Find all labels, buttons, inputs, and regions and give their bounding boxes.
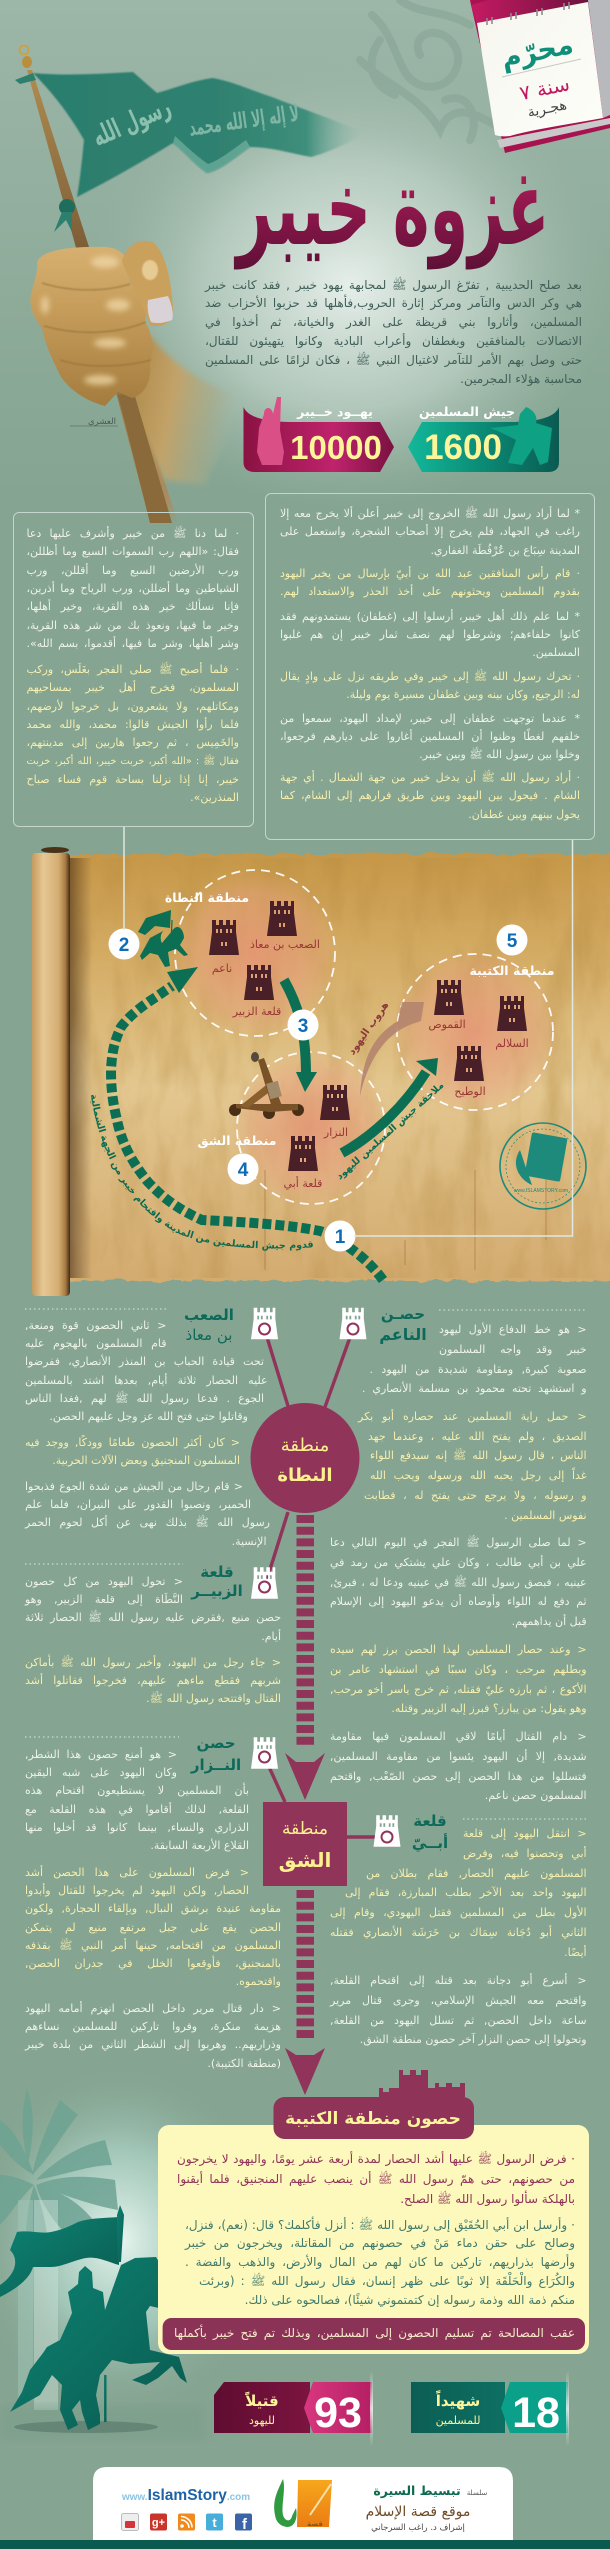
text: Katiba siege (177, 2150, 575, 2206)
text: hypocrites warning (280, 566, 580, 598)
fort headings: أبــيّ (412, 1833, 448, 1852)
text: Naim fort 4: وبطلهم مرحب ، وكان سببًا في استشهاد عامر بن (330, 1663, 587, 1676)
text: Zubayr fort 2 (25, 1654, 281, 1705)
map labels: منطقة النطاة (165, 890, 249, 905)
text: departure to Khaybar (280, 506, 580, 557)
callout connectors to the map (124, 827, 572, 1236)
text: Naim fort 5: المسلمون حصن ناعم. (485, 1789, 587, 1802)
text: Naim fort 2 (358, 1409, 587, 1522)
text: Naim fort 3: قبل أن يداهمهم. (512, 1615, 587, 1628)
text: morning arrival: · فلما أصبح ﷺ صلى الفجر بغَلَس، وركب (26, 663, 239, 676)
route: arrival of the Muslim army (111, 967, 383, 1280)
map labels: قلعة أبي (284, 1176, 322, 1190)
text: Naim fort 5: شديدة, إلا أن اليهود يئسوا من مقاومة المسلمين, (330, 1750, 587, 1763)
dotted separators (25, 1309, 587, 1819)
text: Saab fort 2: المسلمون المنجنيق وبعض الآلات الحربية. (52, 1454, 240, 1467)
map labels (165, 890, 555, 1190)
castles (209, 901, 527, 1171)
text: Ubayy fort 1: المسلمون عليهم الحصار, فقام بطلان من (366, 1867, 587, 1880)
text: Nizar fort 2: بالمنجنيق، فأوقعوا الخلل في جدران الحصن, (25, 1957, 281, 1970)
text: Zubayr fort 2: القتال وافتتحه رسول الله ﷺ. (146, 1692, 281, 1705)
fort headings: النــزار (190, 1756, 241, 1774)
icon: green flag (15, 72, 366, 232)
fort headings: قلعة (200, 1563, 234, 1581)
text: northern entry: يحول بينهم وبين غطفان. (468, 808, 580, 821)
numbered markers: 2 (119, 935, 129, 956)
panel: intro text (204, 276, 582, 386)
text: Katiba siege: بالهلكة سألوا رسول الله ﷺ الصلح. (400, 2192, 575, 2206)
text: Naim fort 2: الصديق ، ولم يفتح الله عليه ، وعندما جهد (368, 1430, 587, 1443)
fort icons with map pins (251, 1308, 400, 1847)
text: prayer on approach: الشياطين وما أضللن، ورب الرياح وما أذرين، (26, 582, 239, 595)
stamp: www.ISLAMSTORY.com (514, 1188, 568, 1194)
text: Naim fort 4 (330, 1643, 587, 1715)
text: Ubayy fort 1: أيضًا. (564, 1946, 587, 1959)
social icons (122, 2514, 252, 2533)
series credits (366, 2483, 487, 2533)
stat: 93 killed: لليهود (249, 2414, 275, 2427)
artist signature: العشري (88, 417, 116, 427)
text: Nizar fort 2: مقاومة عنيدة برشق النبال, وبإلقاء الحجارة, ولكون (25, 1902, 281, 1915)
text: Katiba settlement: وأرضها بذراريهم، تاركين ما كان لهم من المال والأرض، والذهب والفضة . (185, 2255, 575, 2269)
text: Saab fort 1 (25, 1319, 268, 1423)
text: prayer on approach: وخير ما فيها، ونعوذ بك من شر هذه القرية، (26, 619, 239, 632)
text: prayer on approach: · لما دنا ﷺ من خيبر وأشرف عليها دعا (26, 527, 239, 540)
text: Zubayr fort 1 (24, 1575, 281, 1643)
hub: Natat zone: النطاة (277, 1465, 333, 1486)
icon: catapult (229, 1052, 304, 1119)
social icons: f (242, 2516, 248, 2533)
text: Saab fort 1: < ثاني الحصون قوة ومنعة, (25, 1319, 166, 1332)
map labels: القموص (428, 1018, 466, 1031)
text: morning arrival: خيبر، إنا إذا نزلنا بساحة قوم فساء صباح (26, 773, 239, 786)
text: Naim fort 3 (330, 1534, 587, 1628)
text: Naim fort 4: وهو يقول: من يبارز؟ فبرز إليه الزبير وقتله. (391, 1702, 587, 1715)
map labels: الوطيح (454, 1085, 486, 1098)
panel: right prelude box (265, 493, 595, 840)
text: Naim fort 1: و استشهد تحته محمود بن مسلمة الأنصاري . (362, 1382, 587, 1395)
text: Naim fort 2: غداً إلى رجل يحبه الله ورسوله ويحب الله (370, 1469, 587, 1482)
hub: Shaq zone: منطقة (282, 1819, 328, 1839)
text: Ubayy fort 1: < انتقل اليهود إلى قلعة (463, 1827, 587, 1840)
text: northern entry (280, 770, 580, 821)
text: Saab fort 3: الحمير، ونصبوا القدور على النيران، فلما علم (25, 1498, 251, 1511)
map labels: ملاحقة جيش المسلمين لليهود (334, 1080, 446, 1182)
text: Saab fort 1: وقاتلوا حتى فتح الله عز وجل عليهم الحصن. (49, 1410, 248, 1423)
text: prayer on approach (26, 526, 239, 650)
icon: green flag: رسول الله (88, 91, 175, 153)
stat badge: Muslim army 1600: 1600 (424, 428, 502, 467)
fort headings (184, 1305, 448, 1852)
text: Nizar fort 3: هزيمة منكرة، وفروا تاركين للمسلمين نساءهم (25, 2020, 281, 2033)
text: Naim fort 4: < وعند حصار المسلمين لهذا الحصن برز لهم سيده (330, 1643, 587, 1656)
calendar: date of the battle: محرّم (498, 29, 576, 74)
calendar: date of the battle: هجـرية (526, 97, 568, 121)
text: Ubayy fort 1: اليهود واحد بعد الآخر بطلب المبارزة، فقام إلى (345, 1886, 587, 1899)
panel: parchment map (32, 847, 610, 1296)
banner: Katiba forts heading (274, 2070, 474, 2139)
text: Nizar fort 3 (24, 2001, 281, 2070)
panel: intro text: بعد صلح الحديبية , تفرّغ الرسول ﷺ لمجابهة يهود خيبر , فقد كانت خيبر (205, 278, 582, 292)
text: Naim fort 1: صعوبة كبيرة, ومقاومة شديدة من اليهود . (370, 1363, 587, 1376)
text: Ubayy fort 2: < أسرع أبو دجانة بعد قتله إلى اقتحام القلعة, (330, 1974, 587, 1987)
banner: Katiba forts heading: حصون منطقة الكتيبة (285, 2109, 461, 2129)
stat: 93 killed: قتيلاً (244, 2391, 279, 2410)
text: Naim fort 3: ثم دفع له اللواء وأوصاه أن يدعو اليهود إلى الإسلام (330, 1595, 587, 1608)
route caption along curve: قدوم جيش المسلمين من المدينة واقتحام خيبر من الجهة الشمالية (90, 1094, 313, 1251)
panel: left prelude box (12, 512, 254, 827)
text: Katiba settlement: · وأرسل ابن أبي الحُقَيْق إلى رسول الله ﷺ : أنزل فأكلمك؟ قال: (نعم)، فنزل، (185, 2218, 575, 2232)
stat: 18 martyrs: شهيداً (436, 2390, 480, 2410)
text: Al-Raji camp: · تحرك رسول الله ﷺ إلى خيبر وفي طريقه نزل على وادٍ يقال (280, 670, 580, 682)
text: Saab fort 1: الجوع . فدعا رسول الله ﷺ لهم ,فغدا الناس (25, 1392, 264, 1405)
text: Al-Raji camp (280, 668, 580, 701)
panel: intro text: المسلمين، وأثاروا بني قريظة على الغدر والخيانة، ثم أخذوا في (205, 315, 582, 329)
icon: rider with banner silhouette (0, 2205, 187, 2430)
map labels: ناعم (212, 962, 232, 975)
text: Naim fort 5: < دام القتال أيامًا لاقي المسلمون فيها مقاومة (330, 1730, 587, 1743)
text: Naim fort 4: الأكوع ، ثم بارزه عليّ فقتله, ثم خرج ياسر أخو مرحب, (330, 1683, 587, 1696)
text: Al-Raji camp: له: الرجيع، وكان بينه وبين غطفان مسيرة يوم وليلة. (346, 688, 580, 701)
text: Naim fort 3: علي بن أبي طالب ، وكان علي يشتكي من رمد في (330, 1556, 587, 1569)
text: Nizar fort 3: (منطقة الكتيبة). (207, 2057, 281, 2070)
text: morning arrival: المسلمون، فخرج أهل خيبر بمساحيهم (26, 681, 239, 694)
text: departure to Khaybar: راغب في الجهاد، فلم يخرج إلا أصحاب الشجرة، واستعمل على (280, 525, 580, 538)
fort headings: حصن (196, 1734, 236, 1752)
central spine: dashed bar from Natat to Shaq (285, 1515, 325, 1800)
stat: 93 killed (214, 2382, 372, 2437)
text: Nizar fort 2: الحصن يقع على جبل مرتفع منيع لم يتمكن (25, 1921, 281, 1934)
map labels: منطقة الكتيبة (469, 963, 555, 978)
icon: green flag: لا إله إلا الله محمد (187, 101, 301, 142)
text: Naim fort 2: الناس ، قال رسول الله ﷺ إنه سيدفع اللواء (370, 1449, 587, 1462)
text: Naim fort 2: < حمل راية المسلمين عند حصاره أبو بكر (358, 1410, 587, 1423)
series credits: إشراف د. راغب السرجاني (371, 2523, 465, 2533)
text: Naim fort 1 (362, 1322, 587, 1395)
text: Nizar fort 1 (25, 1747, 249, 1852)
text: conclusion strip: عقب المصالحة تم تسليم الحصون إلى المسلمين، وبذلك تم فتح خيبر بأكملها (174, 2326, 575, 2340)
icon: hand gripping the pole (30, 241, 245, 523)
strip: conclusion (163, 2318, 585, 2350)
text: Naim fort 2: نفوس المسلمين . (504, 1509, 587, 1522)
text: Ubayy fort 2: وتحولوا إلى حصن النزار آخر حصون منطقة الشق. (360, 2033, 587, 2046)
stat badge: Muslim army 1600: جيش المسلمين (419, 404, 515, 419)
panel: intro text: محاسبة هؤلاء المجرمين. (460, 372, 582, 386)
text: morning arrival: فقال ﷺ : «الله أكبر، خربت خيبر، الله أكبر، خربت (26, 756, 239, 767)
map labels: قلعة الزبير (232, 1005, 281, 1018)
text: departure to Khaybar: المدينة سِبَاع بن عُرْفُطَة الغفاري. (430, 544, 580, 557)
text: Ubayy fort 1: الأول بطل من المسلمين فقتل اليهودي، وقام إلى (330, 1906, 587, 1919)
stat badge: Muslim army 1600 (408, 404, 559, 472)
text: morning arrival (26, 662, 239, 804)
Islam Story logo (274, 2479, 332, 2528)
map labels: النزار (323, 1126, 348, 1139)
text: Saab fort 1: قام المسلمون بالهجوم عليه (25, 1337, 166, 1350)
text: Nizar fort 1: وكان اليهود على شبه اليقين (25, 1766, 177, 1779)
palm and rider scene (0, 2060, 275, 2440)
text: Ghatafan retreat: وخلوا بين رسول الله ﷺ وبين خيبر. (419, 748, 580, 761)
text: Naim fort 1: < هو خط الدفاع الأول ليهود (439, 1323, 587, 1336)
text: Katiba settlement (184, 2216, 575, 2308)
text: morning arrival: فلما رأوا الجيش قالوا: محمد، والله محمد (26, 718, 239, 731)
scroll roll (32, 847, 70, 1296)
numbered markers: 1 (335, 1227, 346, 1248)
text: Ghatafan retreat: * عندما توجهت غطفان إلى خيبر، لإمداد اليهود، سمعوا من (280, 712, 580, 724)
text: Saab fort 1: تحت قيادة الحباب بن المنذر الأنصاري، ففرضوا (25, 1355, 264, 1368)
text: Zubayr fort 1: النَّطَاة إلى قلعة الزبير, وهو (25, 1593, 183, 1606)
series credits: سلسلة (467, 2489, 487, 2497)
numbered markers: 5 (507, 931, 518, 952)
stat: 18 martyrs: 18 (512, 2389, 560, 2437)
map labels: هروب اليهود (347, 1000, 391, 1057)
stat: 93 killed: 93 (314, 2389, 362, 2437)
text: Naim fort 3: < لما صلى الرسول ﷺ الفجر في اليوم التالي دعا (330, 1536, 587, 1549)
fort headings: بن معاذ (186, 1326, 232, 1344)
text: northern entry: الشام . فيحول بين اليهود وبين طريق فرارهم إلى الشام، كما (280, 789, 580, 802)
stat badge: Khaybar Jews 10000 (244, 397, 394, 472)
text: prayer on approach: فإنا نسألك خير هذه القرية، وخير أهلها، (26, 600, 239, 613)
text: Ghatafan retreat (280, 712, 580, 761)
arrow: advance to Shaq zone (284, 980, 317, 1092)
footer card (93, 2467, 513, 2540)
stat badge: Khaybar Jews 10000: يهــود خــيبر (296, 404, 373, 419)
stat shine marks (370, 2370, 569, 2447)
text: prayer on approach: فقال: «اللهم رب السموات السبع وما أظللن، (26, 545, 239, 558)
series credits: تبسيط السيرة (373, 2483, 461, 2498)
text: Zubayr fort 2: شربهم فقطع ماءهم عليهم، فخرجوا فقاتلوا أشد (25, 1674, 281, 1687)
text: Saab fort 3: رسول الله ﷺ بذلك نهى عن أكل لحوم الحمر (25, 1516, 270, 1529)
text: departure to Khaybar: * لما أراد رسول الله ﷺ الخروج إلى خيبر أعلن ألا يخرج معه إلا (280, 507, 580, 520)
text: Ghatafan alliance: * لما علم ذلك أهل خيبر، أرسلوا إلى (غطفان) يستمدونهم فقد (280, 610, 580, 622)
text: Ubayy fort 1: الثاني أبو دُجَانة سِمَاك بن خَرَشَة الأنصاري فقتله (330, 1926, 587, 1939)
text: Ubayy fort 2: واقتحم معه الجيش الإسلامي، وجرى قتال مرير (330, 1994, 587, 2007)
map labels: الصعب بن معاذ (250, 938, 320, 951)
text: northern entry: · أراد رسول الله ﷺ أن يدخل خيبر من جهة الشمال . أي جهة (280, 771, 580, 784)
text: Saab fort 3 (24, 1480, 270, 1548)
text: morning arrival: والخَمِيس ، ثم رجعوا هاربين إلى مدينتهم، (26, 736, 239, 749)
connector lines to forts (264, 1329, 387, 1837)
social icons: g+ (152, 2517, 165, 2529)
arabesque watermark (360, 0, 495, 140)
text: Naim fort 5 (330, 1729, 587, 1802)
numbered markers (108, 924, 528, 1252)
icon: rider with flag (138, 910, 188, 967)
text: Ubayy fort 1: أبي وتحصنوا فيه، وفرض (463, 1847, 587, 1860)
text: Ghatafan alliance: المسلمين. (532, 646, 580, 659)
text: morning arrival: ومكاتلهم، ولا يشعرون، بل خرجوا لأرضهم، (26, 700, 239, 713)
numbered markers: 4 (238, 1160, 249, 1181)
hub: Shaq zone (263, 1802, 347, 1886)
text: Katiba siege: · فرض الرسول ﷺ عليها أشد الحصار لمدة أربعة عشر يومًا، واليهود لا يخرجون (177, 2152, 575, 2166)
text: Zubayr fort 1: أيام. (261, 1630, 281, 1643)
map labels: منطقة الشق (198, 1133, 276, 1148)
stat: 18 martyrs: للمسلمين (436, 2414, 480, 2427)
text: Nizar fort 1: بأن المسلمين لا يستطيعون اقتحام هذه (25, 1784, 249, 1797)
panel: Katiba forts box (158, 2125, 589, 2354)
panel: intro text: الاتصالات بالمنافقين وبغطفان وأعراب البادية وكانوا يتهيئون للقتال، (205, 334, 582, 348)
text: Nizar fort 2: الحصار, ولكن اليهود لم يخرجوا للقتال وأبدوا (25, 1884, 249, 1897)
fort headings: حصـن (381, 1305, 425, 1323)
text: Nizar fort 1: الذراري والنساء, بينما كانوا قد أخلوا منها (25, 1821, 249, 1834)
stat badge: Khaybar Jews 10000: 10000 (290, 429, 382, 466)
text: Saab fort 3: < قام رجال من الجيش من شدة الجوع فذبحوا (25, 1480, 243, 1493)
text: Ghatafan alliance (280, 609, 580, 659)
text: prayer on approach: ورب الأرضين السبع وما أقللن، ورب (26, 564, 239, 577)
text: Saab fort 3: الإنسية. (232, 1535, 266, 1548)
text: Katiba siege: من حصونهم، حتى همّ رسول الله ﷺ أن ينصب عليهم المنجنيق، فلما أيقنوا (177, 2172, 575, 2186)
text: hypocrites warning: بقدوم المسلمين ويحثونهم على أخذ الحذر والاستعداد لهم. (280, 585, 580, 598)
text: Nizar fort 1: القلاع الأربعة السابقة. (150, 1839, 249, 1852)
text: Nizar fort 2: واقتحموه. (236, 1975, 281, 1988)
text: Nizar fort 3: < دار قتال مرير داخل الحصن انهزم أمامه اليهود (25, 2002, 281, 2015)
calendar: date of the battle (470, 0, 610, 153)
text: Nizar fort 3: وذراريهم.. وهربوا إلى الشطر الثاني من بلدة خيبر (25, 2038, 281, 2051)
zone rings (175, 870, 553, 1204)
fort headings: الصعب (184, 1306, 234, 1324)
arrow: pursuit of the Jews (342, 1058, 438, 1153)
text: Saab fort 2 (25, 1434, 240, 1467)
stamp (500, 1123, 586, 1209)
text: Zubayr fort 1: حصن منيع ,فقرض عليه رسول الله ﷺ الحصار ثلاثة (25, 1611, 281, 1624)
text: Katiba settlement: والكُرَاع والْحَلْقَة إلا ثوبًا على ظهر إنسان، فقال رسول الله ﷺ : (وبرئت (199, 2274, 575, 2288)
site address: www.IslamStory.com (121, 2487, 250, 2504)
social icons: t (212, 2515, 217, 2530)
text: Ubayy fort 1 (330, 1827, 587, 1959)
text: Ubayy fort 2: ساعة داخل الحصن, ثم تسلل اليهود من القلعة, (330, 2014, 587, 2027)
text: prayer on approach: وشر أهلها، وشر ما فيها، أقدموا، بسم الله». (26, 637, 239, 650)
fort headings: الزبيــر (190, 1582, 243, 1600)
hub: Shaq zone: الشق (279, 1848, 331, 1872)
header background glow (0, 0, 610, 510)
text: Nizar fort 1: القلعة, لذلك أقاموا في هذه القلعة مع (25, 1803, 249, 1816)
text: Nizar fort 2 (25, 1865, 281, 1988)
text: Katiba settlement: وصالح على حقن دماء مَنْ في حصونهم من المقاتلة، ويخرجون من خيبر (185, 2236, 575, 2250)
footer strip (0, 2540, 610, 2549)
text: Ghatafan retreat: خلفهم لغطًا وظنوا أن المسلمين أغاروا على ديارهم فرجعوا، (280, 730, 580, 743)
text: Naim fort 5: فتسللوا من هذا الحصن إلى حصن الصّعْب, واقتحم (330, 1770, 587, 1783)
text: hypocrites warning: · قام رأس المنافقين عبد الله بن أبيّ بإرسال من يخبر اليهود (280, 567, 580, 580)
Islam Story logo: قصة (307, 2520, 323, 2528)
fort headings: قلعة (413, 1812, 447, 1830)
text: Nizar fort 2: المسلمون من اقتحامه, حينها أمر النبي ﷺ بقذفه (25, 1939, 281, 1952)
text: Saab fort 2: < كان أكثر الحصون طعامًا وودكًا, ووجد فيه (25, 1436, 240, 1449)
text: Ghatafan alliance: كانوا حلفاءهم؛ وشرطوا لهم نصف ثمار خيبر إن هم غلبوا (280, 628, 580, 641)
stat: 18 martyrs (411, 2382, 568, 2437)
text: Zubayr fort 1: < تحول اليهود من كل حصون (25, 1575, 183, 1588)
arrow: Jews fleeing (360, 1002, 424, 1096)
panel: intro text: حتى وصل بهم الأمر للتآمر لاغتيال النبي ﷺ ، فكان لزامًا على المسلمين (205, 353, 582, 367)
text: morning arrival: المنذرين». (190, 791, 239, 804)
text: Ubayy fort 2 (330, 1973, 587, 2046)
fort headings: الناعم (379, 1325, 427, 1344)
text: Katiba settlement: منكم ذمة الله وذمة رسوله إن كتمتموني شيئًا)، فصالحوه على ذلك. (245, 2292, 575, 2306)
text: Nizar fort 2: < فرض المسلمون على هذا الحصن أشد (25, 1866, 249, 1879)
icon: flag pole (20, 46, 178, 523)
map labels: السلالم (495, 1037, 529, 1050)
numbered markers: 3 (298, 1016, 308, 1037)
hub: Natat zone: منطقة (281, 1435, 329, 1456)
hub: Natat zone (250, 1403, 360, 1513)
artist signature (70, 417, 118, 427)
parchment sheet (62, 854, 610, 1281)
series credits: موقع قصة الإسلام (366, 2504, 470, 2520)
spine: dashed bar from Shaq to Katiba (285, 1890, 325, 2095)
text: Naim fort 3: عينيه ، فبصق رسول الله ﷺ في عينيه ودعا له ، فبرئ, (330, 1576, 587, 1589)
text: Naim fort 2: و رسوله ، ولا يرجع حتى يفتح له ، فطابت (364, 1489, 587, 1502)
calendar: date of the battle: سنة ٧ (517, 71, 572, 105)
panel: intro text: هي وكر الدس والتآمر ومركز إثارة الحروب,فأهلها قد حزبوا الأحزاب ضد (205, 296, 582, 310)
text: Nizar fort 1: < هو أمنع حصون هذا الشطر, (25, 1748, 177, 1761)
text: Zubayr fort 2: < جاء رجل من اليهود، وأخبر رسول الله ﷺ بأماكن (25, 1656, 281, 1669)
text: Saab fort 1: عليه الحصار ثلاثة أيام, بعدها اشتد بالمسلمين (25, 1374, 268, 1387)
text: Naim fort 1: خيبر وقد واجه المسلمون (439, 1343, 587, 1356)
